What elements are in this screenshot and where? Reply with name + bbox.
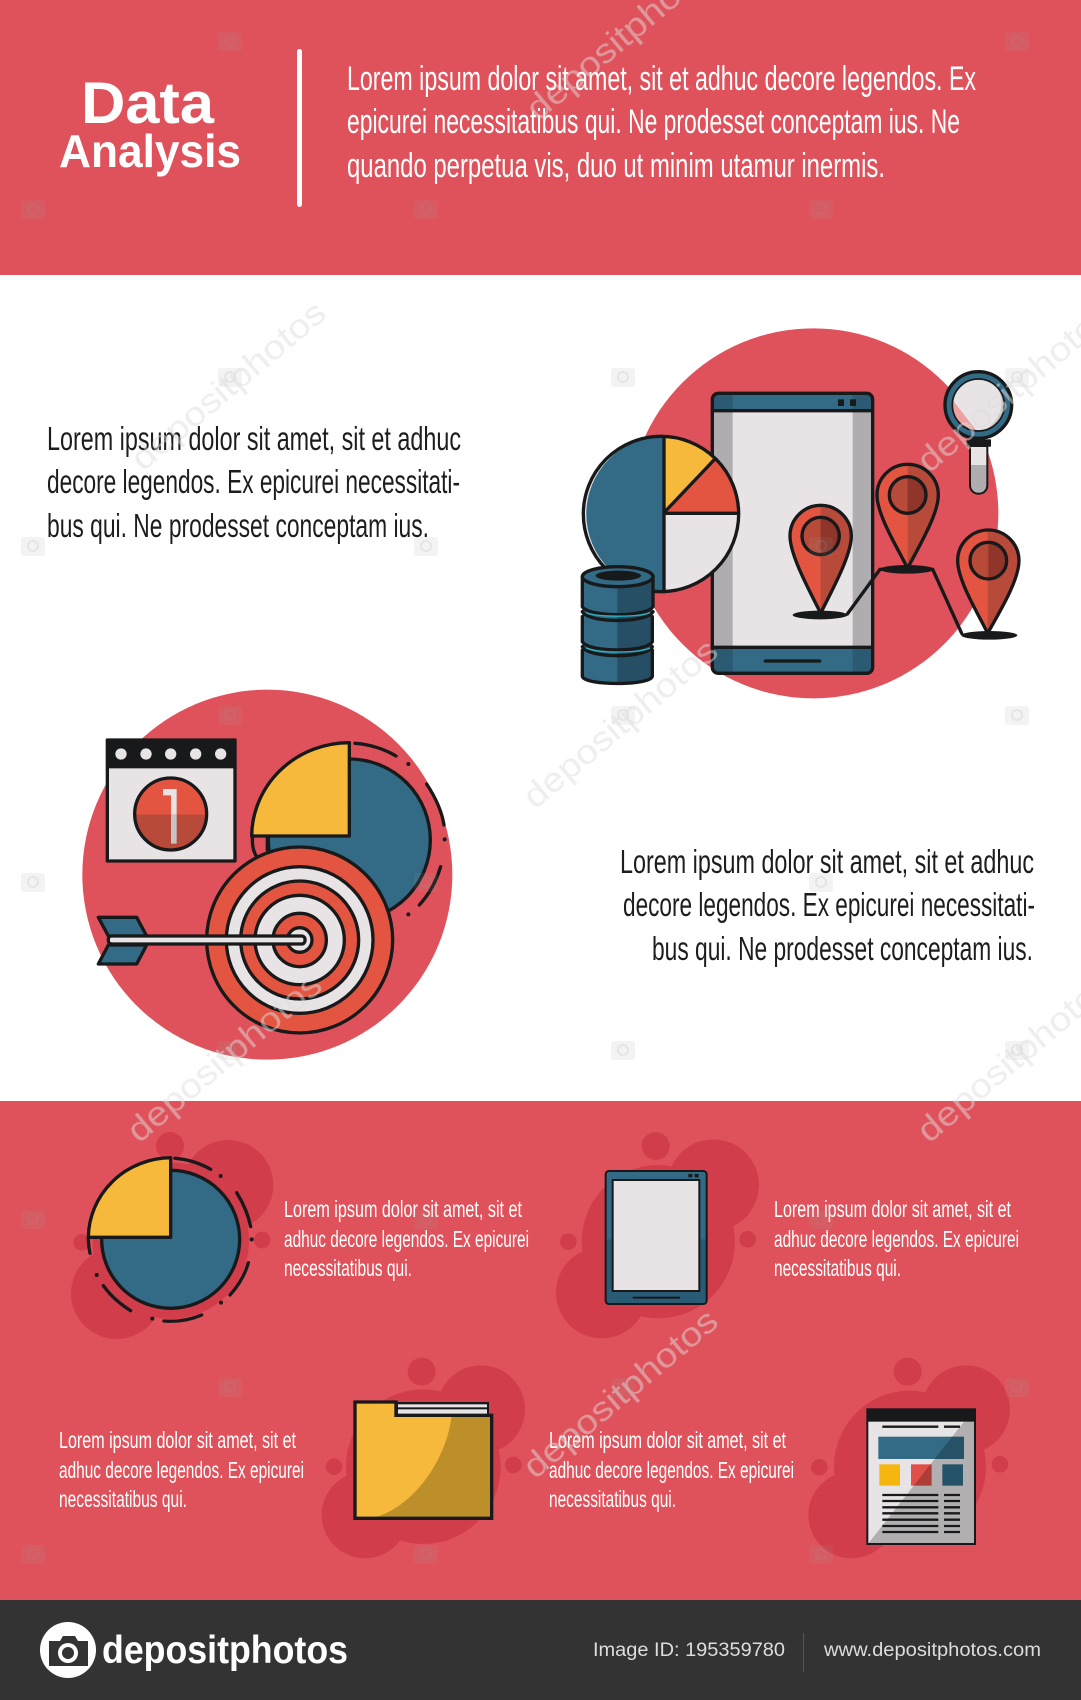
background blobs (71, 1132, 273, 1339)
icon: database (582, 567, 653, 683)
text: tablet item (774, 1196, 1019, 1281)
background blobs (556, 1132, 759, 1338)
icon: location pin 1 (790, 505, 851, 619)
text: tablet item: necessitatibus qui. (774, 1255, 901, 1281)
text block: upper left: Lorem ipsum dolor sit amet, sit et adhuc (47, 420, 461, 457)
illustration: calendar, pie, target (82, 690, 452, 1060)
title (59, 71, 241, 177)
text: document item (549, 1427, 794, 1512)
footer bar (0, 1600, 1081, 1700)
icon: location pin 3 (958, 530, 1019, 640)
text: document item: adhuc decore legendos. Ex epicurei (549, 1457, 794, 1483)
icon: folder (355, 1402, 492, 1518)
text: document item: Lorem ipsum dolor sit amet, sit et (549, 1427, 786, 1453)
icon: tablet (606, 1171, 707, 1304)
logo icon: camera (40, 1622, 96, 1678)
text: document item: necessitatibus qui. (549, 1486, 676, 1512)
connector line between pins (847, 569, 962, 633)
text: pie chart item (284, 1196, 529, 1281)
panel: header (0, 0, 1081, 275)
text block: middle right (620, 843, 1035, 967)
item: folder (322, 1358, 525, 1558)
icon: location pin 2 (877, 464, 938, 574)
text block: upper left: decore legendos. Ex epicurei necessitati- (47, 463, 460, 500)
text: folder item: necessitatibus qui. (59, 1486, 187, 1512)
watermarks: depositphotos (516, 1301, 726, 1486)
icon: target (207, 847, 393, 1033)
vertical divider (297, 49, 302, 207)
text: pie chart item: Lorem ipsum dolor sit amet, sit et (284, 1196, 522, 1222)
text: pie chart item: adhuc decore legendos. Ex epicurei (284, 1226, 529, 1252)
text: pie chart item: necessitatibus qui. (284, 1255, 412, 1281)
icon: arrow (98, 917, 305, 964)
item: tablet (556, 1132, 759, 1338)
text block: upper left: bus qui. Ne prodesset conceptam ius. (47, 507, 429, 544)
item: pie chart (71, 1132, 273, 1339)
red circle (628, 328, 998, 698)
background blobs (808, 1358, 1010, 1558)
item: document (808, 1358, 1010, 1558)
text: folder item: adhuc decore legendos. Ex epicurei (59, 1457, 304, 1483)
background blobs (322, 1358, 525, 1558)
illustration: phone, pie, database, pins (582, 328, 1019, 698)
title: Analysis (59, 125, 241, 177)
text: folder item (59, 1427, 304, 1512)
icon: pie chart (88, 1158, 254, 1321)
text: folder item: Lorem ipsum dolor sit amet, sit et (59, 1427, 296, 1453)
image id: Image ID: 195359780 (593, 1640, 785, 1661)
icon: magnifying glass (945, 372, 1012, 494)
title: Data (81, 71, 215, 136)
icon: document (867, 1409, 975, 1544)
panel: bottom red section (0, 1101, 1081, 1600)
header text block (347, 60, 976, 185)
red circle (82, 690, 452, 1060)
text block: upper left (47, 420, 461, 544)
icon: pie chart (583, 436, 739, 592)
watermarks: depositphotos (120, 965, 330, 1150)
website: www.depositphotos.com (823, 1640, 1041, 1661)
icon: smartphone (712, 393, 873, 673)
logo wordmark: depositphotos (102, 1629, 348, 1672)
watermarks: depositphotos (124, 293, 334, 478)
icon: calendar (106, 739, 236, 861)
icon: pie chart with dashes (252, 743, 447, 921)
watermarks: depositphotos (516, 631, 726, 816)
